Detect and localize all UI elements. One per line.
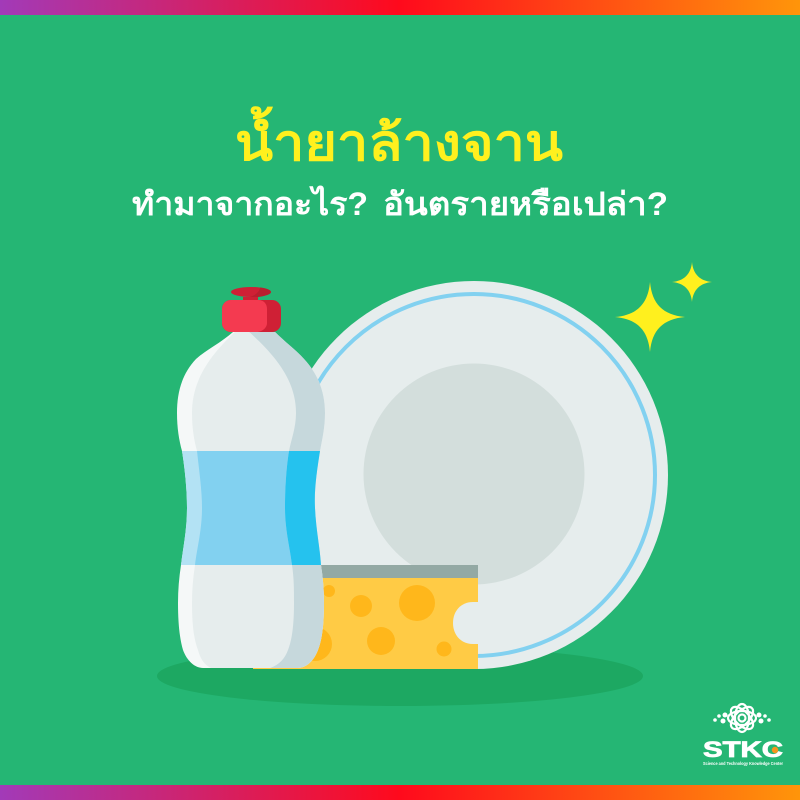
logo: STKC	[703, 703, 783, 766]
subtitle: อันตรายหรือเปล่า?	[383, 186, 668, 222]
illustration: sponge	[253, 565, 478, 669]
subtitle: ทำมาจากอะไร?	[132, 185, 368, 222]
top gradient bar	[0, 0, 800, 15]
icon: small sparkle	[672, 262, 712, 302]
logo tagline: Science and Technology Knowledge Center	[703, 761, 783, 766]
subtitle	[132, 185, 668, 222]
logo atom icon	[713, 703, 771, 733]
illustration: plate	[280, 281, 668, 669]
logo wordmark: STKC	[703, 737, 783, 762]
title: น้ำยาล้างจาน	[235, 106, 563, 171]
illustration: dish soap bottle	[177, 287, 325, 668]
logo orange dot	[772, 747, 778, 753]
icon: large sparkle	[615, 282, 685, 352]
bottom gradient bar	[0, 785, 800, 800]
bottle cap	[222, 287, 281, 332]
ground shadow	[157, 646, 643, 706]
